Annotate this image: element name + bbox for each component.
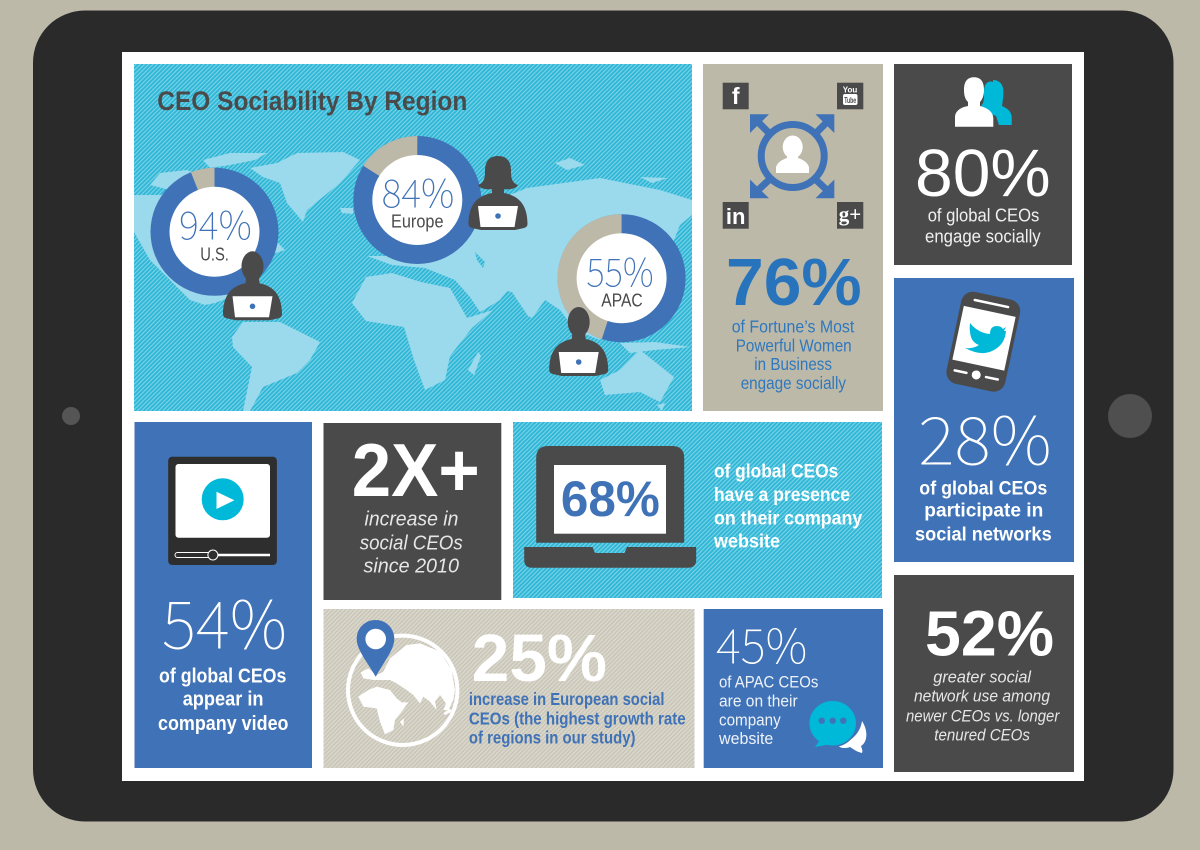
- panel: 45% APAC CEOs: [704, 607, 883, 768]
- caption: appear in company video: company video: [158, 713, 288, 735]
- stat: 28%: 28%: [918, 388, 1052, 484]
- home button: [1108, 394, 1152, 438]
- panel: CEO sociability by region: [134, 64, 692, 411]
- caption: APAC CEOs on website: are on their: [719, 693, 798, 711]
- caption: Fortune's women: Powerful Women: [736, 336, 852, 356]
- caption: participate in social networks: participate in: [924, 500, 1043, 522]
- icon: facebook: f: [732, 83, 740, 109]
- caption: Fortune's women: engage socially: [741, 373, 846, 393]
- caption: Fortune's women: in Business: [754, 354, 832, 374]
- panel: 2X+ increase: [324, 423, 501, 600]
- donut: Europe 84%: 84%: [382, 164, 454, 220]
- icon: youtube: You: [843, 86, 857, 94]
- donut: U.S. 94%: [150, 168, 278, 296]
- icon: google plus: g+: [839, 202, 861, 226]
- donut: APAC 55%: 55%: [586, 243, 654, 299]
- stat: 76%: 76%: [726, 245, 862, 320]
- caption: highest growth rate: increase in European social: [469, 689, 664, 709]
- caption: participate in social networks: social networks: [915, 523, 1052, 545]
- caption: increase since 2010: social CEOs: [360, 532, 463, 554]
- caption: engage socially: [925, 206, 1041, 247]
- caption: highest growth rate: CEOs (the highest growth rate: [469, 708, 686, 728]
- icon: man with laptop, U.S.: [223, 251, 282, 320]
- panel: 28% social networks: [894, 278, 1074, 562]
- caption: highest growth rate: of regions in our study): [469, 728, 636, 748]
- caption: Fortune's women: of Fortune’s Most: [732, 316, 854, 336]
- caption: presence on company website: [713, 461, 863, 553]
- icon: youtube: [837, 83, 863, 109]
- icon: chat bubbles: [809, 700, 866, 753]
- caption: appear in company video: appear in: [183, 689, 264, 711]
- stat: 2X+: 2X+: [352, 428, 480, 512]
- stat: 45%: 45%: [716, 607, 807, 677]
- caption: highest growth rate: [469, 689, 686, 748]
- icon: phone with twitter bird: [944, 289, 1022, 394]
- caption: APAC CEOs on website: [718, 673, 818, 748]
- panel: 68% company website: [513, 422, 882, 598]
- panel: 54% company video: [134, 422, 312, 768]
- stat: 25%: 25%: [472, 621, 607, 696]
- icon: facebook: [723, 83, 749, 109]
- icon: connected person with arrows: [750, 114, 834, 198]
- caption: increase since 2010: [360, 509, 463, 578]
- stat: 54%: 54%: [162, 572, 287, 668]
- caption: newer CEOs: network use among: [914, 687, 1050, 706]
- caption: newer CEOs: tenured CEOs: [934, 726, 1030, 745]
- panel: 80% engage socially: [894, 64, 1072, 265]
- caption: engage socially: engage socially: [925, 227, 1041, 247]
- icon: globe with location pin: [348, 620, 457, 745]
- icon: linkedin: [723, 202, 749, 229]
- icon: man and woman: [955, 77, 1012, 127]
- icon: laptop with 68%: [524, 446, 696, 568]
- caption: appear in company video: of global CEOs: [159, 666, 286, 688]
- caption: newer CEOs: [906, 667, 1060, 745]
- caption: increase since 2010: since 2010: [364, 556, 459, 578]
- world map: [134, 152, 692, 411]
- icon: woman with laptop, Europe: [468, 156, 528, 230]
- caption: presence on company website: on their company: [714, 508, 863, 529]
- caption: APAC CEOs on website: website: [718, 730, 773, 748]
- donut: APAC 55%: APAC: [601, 291, 643, 311]
- donut: Europe 84%: Europe: [391, 212, 444, 232]
- donut: APAC 55%: [557, 214, 686, 342]
- camera: [62, 407, 80, 425]
- icon: youtube: Tube: [844, 96, 857, 105]
- caption: participate in social networks: [915, 477, 1052, 545]
- caption: increase since 2010: increase in: [364, 509, 458, 531]
- title: CEO Sociability By Region: [157, 86, 467, 116]
- icon: man with laptop, APAC: [549, 307, 608, 376]
- caption: newer CEOs: newer CEOs vs. longer: [906, 707, 1060, 726]
- caption: presence on company website: of global CEOs: [714, 461, 838, 482]
- caption: appear in company video: [158, 666, 288, 735]
- caption: Fortune's women: [732, 316, 854, 393]
- donut: Europe 84%: [353, 136, 481, 264]
- panel: Fortune's most powerful women: [703, 64, 883, 411]
- stat: 52%: 52%: [925, 598, 1054, 670]
- donut: U.S. 94%: U.S.: [200, 245, 229, 265]
- icon: video player: [168, 457, 277, 565]
- caption: engage socially: of global CEOs: [928, 206, 1039, 226]
- icon: laptop with 68%: 68%: [561, 471, 660, 527]
- stat: 80%: 80%: [915, 136, 1051, 211]
- icon: linkedin: in: [726, 204, 745, 229]
- donut: U.S. 94%: 94%: [179, 195, 252, 251]
- panel: 25% European social CEOs: [324, 609, 694, 768]
- caption: APAC CEOs on website: of APAC CEOs: [719, 673, 818, 691]
- caption: APAC CEOs on website: company: [719, 712, 781, 730]
- caption: newer CEOs: greater social: [933, 667, 1032, 686]
- caption: presence on company website: have a presence: [714, 485, 850, 506]
- panel: 52% greater social network use: [894, 575, 1074, 772]
- caption: participate in social networks: of global CEOs: [919, 477, 1047, 499]
- caption: presence on company website: website: [713, 532, 780, 553]
